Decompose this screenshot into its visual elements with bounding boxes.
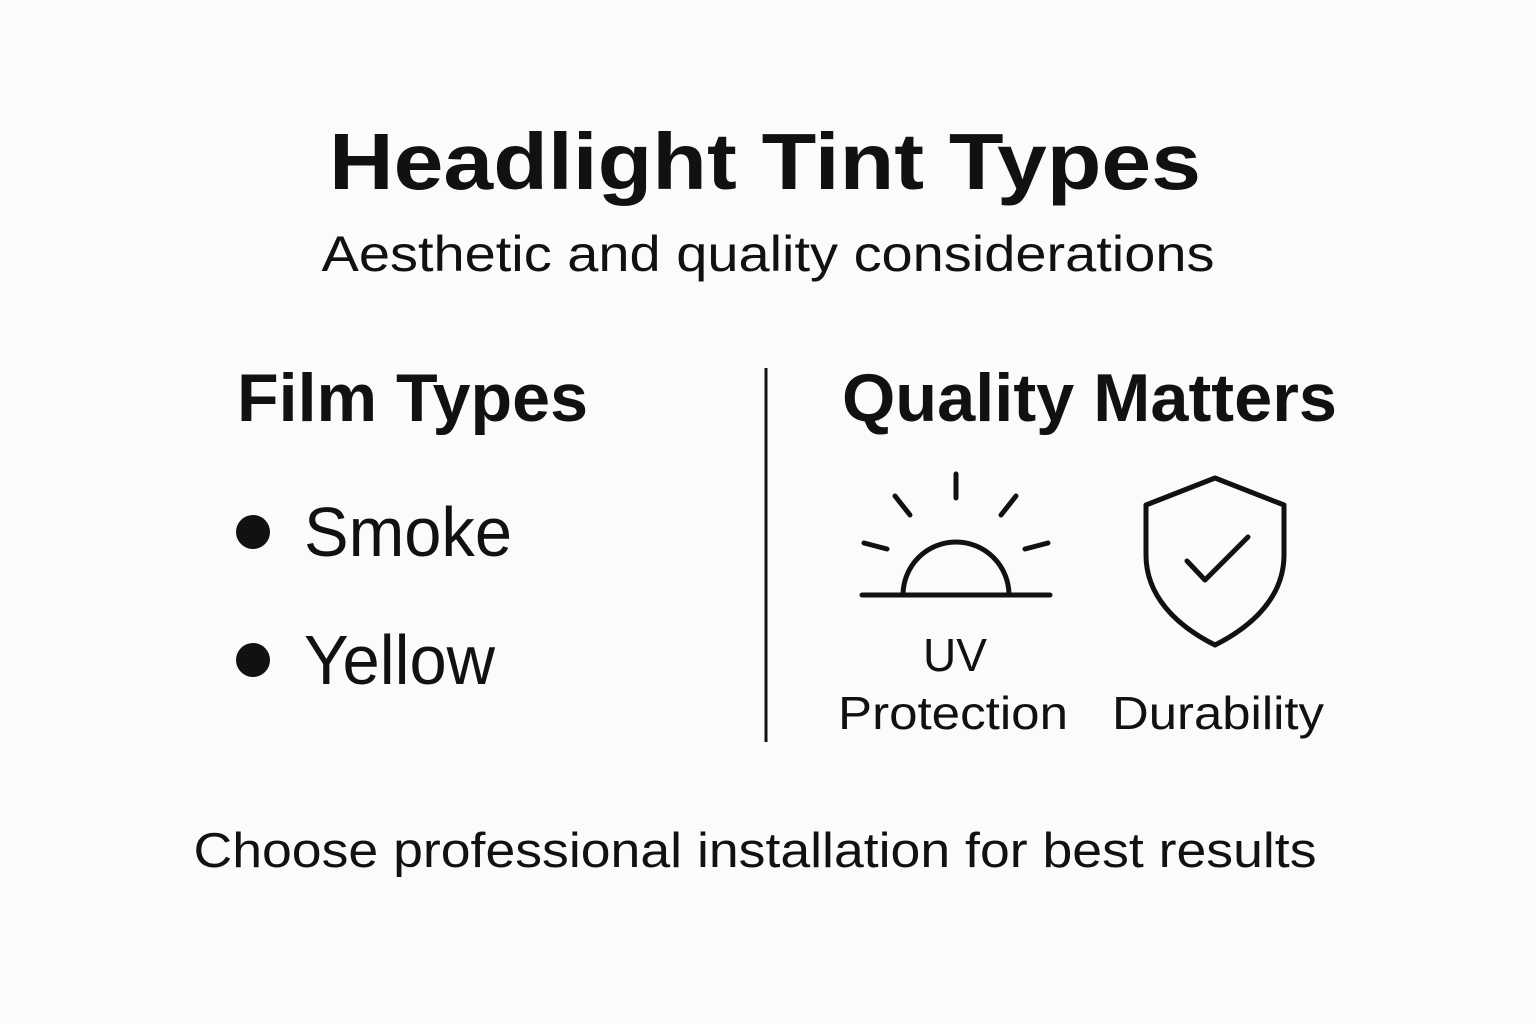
label: UV protection: UV: [923, 629, 987, 681]
list item: smoke: Smoke: [304, 493, 512, 571]
panel: quality matters: [838, 360, 1337, 739]
heading: quality matters: Quality Matters: [842, 360, 1337, 436]
footer text: Choose professional installation for best results: [194, 824, 1316, 878]
label: durability: Durability: [1112, 687, 1324, 739]
icon: shield: [1146, 478, 1284, 645]
panel: film types: [236, 360, 588, 699]
list item: yellow: Yellow: [304, 621, 495, 699]
title: Headlight Tint Types: [329, 117, 1201, 206]
label: UV protection: Protection: [838, 687, 1068, 739]
heading: film types: Film Types: [237, 360, 588, 436]
subtitle: Aesthetic and quality considerations: [322, 226, 1214, 282]
label: UV protection: [838, 629, 1068, 739]
icon: sun (UV): [862, 474, 1050, 595]
